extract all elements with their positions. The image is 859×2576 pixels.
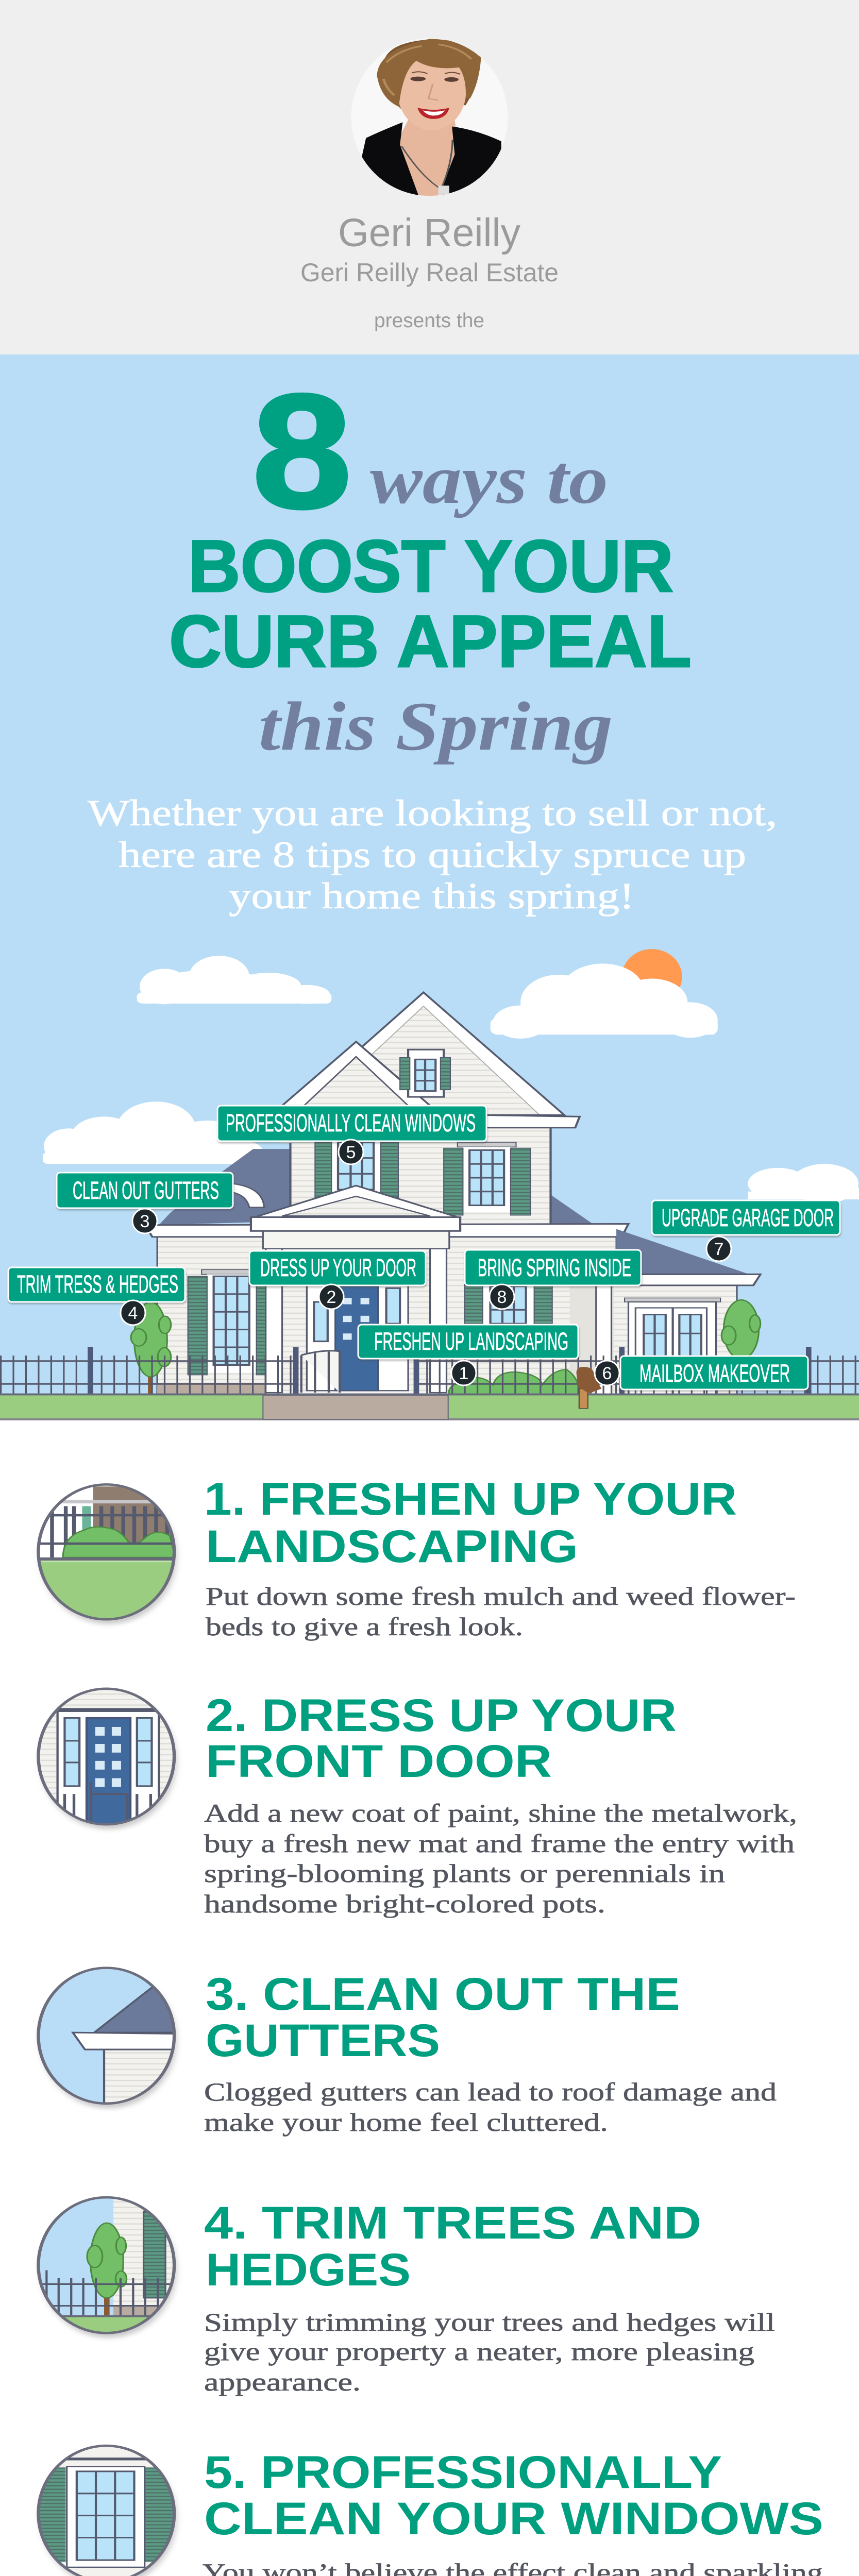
- label: dress up your door: [249, 1251, 426, 1285]
- label: clean out gutters: CLEAN OUT GUTTERS: [73, 1177, 219, 1205]
- description: [204, 2077, 777, 2137]
- iron fence: [0, 1347, 859, 1395]
- title: [169, 360, 692, 765]
- title: BOOST YOUR: [188, 526, 673, 607]
- lower right window: [465, 1284, 552, 1326]
- heading: HEDGES: [206, 2244, 411, 2295]
- gable window: [400, 1049, 450, 1097]
- label: bring spring inside: BRING SPRING INSIDE: [478, 1255, 631, 1282]
- icon: tree: [38, 2195, 176, 2337]
- label: clean out gutters: [57, 1173, 233, 1208]
- heading: CLEAN YOUR WINDOWS: [204, 2493, 823, 2544]
- description: make your home feel cluttered.: [204, 2108, 608, 2137]
- tip 4: trim trees and hedges: [38, 2195, 775, 2396]
- intro paragraph: Whether you are looking to sell or not,: [88, 792, 777, 834]
- label: trim tress and hedges: [8, 1267, 185, 1302]
- intro paragraph: here are 8 tips to quickly spruce up: [119, 834, 746, 875]
- house upper storey: [159, 992, 593, 1226]
- label: upgrade garage door: [652, 1200, 840, 1235]
- label: dress up your door: DRESS UP YOUR DOOR: [260, 1255, 416, 1282]
- tip 2: dress up your front door: [38, 1688, 797, 1918]
- tip 5: professionally clean your windows: [38, 2444, 823, 2576]
- title: CURB APPEAL: [169, 601, 692, 683]
- heading: 4. TRIM TREES AND: [204, 2197, 701, 2248]
- heading: FRONT DOOR: [206, 1735, 552, 1787]
- icon: window: [38, 2444, 176, 2576]
- icon: front door: [38, 1688, 176, 1829]
- label: freshen up landscaping: FRESHEN UP LANDSCAPING: [374, 1328, 568, 1355]
- numbered markers on house: 3: [140, 1212, 149, 1231]
- trees: [131, 1300, 761, 1395]
- icon: landscaping: [38, 1483, 176, 1624]
- description: give your property a neater, more pleasing: [204, 2337, 754, 2366]
- upper windows: [315, 1140, 530, 1215]
- tip 1: freshen up landscaping: [38, 1473, 796, 1641]
- description: [204, 1799, 797, 1918]
- heading: 3. CLEAN OUT THE: [206, 1968, 680, 2020]
- description: spring-blooming plants or perennials in: [204, 1859, 725, 1888]
- heading: GUTTERS: [206, 2014, 440, 2066]
- heading: 5. PROFESSIONALLY: [204, 2446, 722, 2498]
- icon: gutter: [38, 1968, 176, 2108]
- house lower storey: [145, 1224, 761, 1395]
- numbered markers on house: 7: [714, 1240, 723, 1259]
- heading: [204, 2446, 823, 2544]
- heading: [206, 1689, 677, 1787]
- numbered markers on house: 5: [346, 1143, 356, 1162]
- description: Add a new coat of paint, shine the metalwork,: [204, 1799, 797, 1827]
- description: appearance.: [204, 2367, 361, 2396]
- presents the: presents the: [374, 310, 484, 332]
- title: 8: [252, 360, 352, 542]
- left window: [188, 1269, 267, 1375]
- label: bring spring inside: [465, 1250, 641, 1285]
- intro paragraph: your home this spring!: [229, 875, 634, 917]
- description: handsome bright-colored pots.: [204, 1889, 605, 1918]
- agent portrait photo: [350, 36, 510, 197]
- heading: [204, 1473, 737, 1572]
- label: mailbox makeover: [620, 1356, 808, 1389]
- illustration: house scene: [0, 949, 859, 1420]
- agent name: Geri Reilly: [338, 211, 520, 255]
- panel: agent header: [0, 0, 859, 354]
- lawn and front walk: [0, 1394, 859, 1420]
- numbered markers on house: 2: [327, 1287, 336, 1307]
- label: freshen up landscaping: [358, 1325, 578, 1359]
- description: Put down some fresh mulch and weed flower-: [206, 1582, 796, 1611]
- heading: LANDSCAPING: [206, 1520, 578, 1572]
- label: professionally clean windows: PROFESSIONALLY CLEAN WINDOWS: [226, 1110, 476, 1137]
- panel: sky hero background: [0, 354, 859, 1420]
- hedges: [449, 1370, 581, 1395]
- numbered markers on house: 8: [497, 1287, 507, 1307]
- description: [204, 2308, 775, 2396]
- heading: 2. DRESS UP YOUR: [206, 1689, 677, 1741]
- portico and front door: [251, 1185, 460, 1394]
- agency name: Geri Reilly Real Estate: [300, 258, 559, 287]
- intro paragraph: [88, 792, 777, 917]
- description: Simply trimming your trees and hedges will: [204, 2308, 775, 2336]
- heading: [204, 2197, 701, 2295]
- description: [206, 1582, 796, 1641]
- icon: sun: [622, 949, 682, 1004]
- title: ways to: [370, 442, 608, 518]
- tip 3: clean out the gutters: [38, 1968, 777, 2137]
- clouds: [43, 956, 859, 1204]
- title: this Spring: [259, 688, 613, 765]
- numbered markers on house: 1: [459, 1364, 468, 1383]
- description: buy a fresh new mat and frame the entry with: [204, 1829, 795, 1858]
- numbered markers on house: 6: [602, 1364, 612, 1383]
- numbered markers on house: [121, 1140, 731, 1385]
- panel: white tips background: [0, 1420, 859, 2576]
- heading: 1. FRESHEN UP YOUR: [204, 1473, 737, 1524]
- description: Clogged gutters can lead to roof damage and: [204, 2077, 777, 2106]
- heading: [206, 1968, 680, 2066]
- description: beds to give a fresh look.: [206, 1612, 523, 1641]
- callout labels on house: [8, 1106, 840, 1389]
- icon: mailbox: [576, 1367, 601, 1409]
- label: trim tress and hedges: TRIM TRESS & HEDGES: [17, 1271, 178, 1298]
- label: professionally clean windows: [217, 1106, 486, 1141]
- numbered markers on house: 4: [128, 1303, 138, 1323]
- garage window: [625, 1298, 720, 1395]
